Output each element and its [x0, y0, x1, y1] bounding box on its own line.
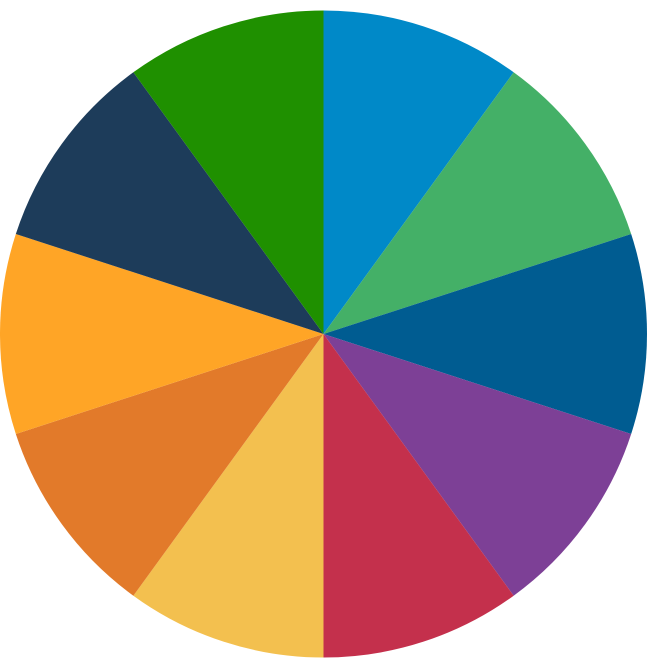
slice: orange: [16, 334, 324, 596]
slice: amber: [0, 234, 324, 434]
slice: crimson: [324, 334, 514, 658]
slice: purple: [324, 334, 631, 596]
slice: navy: [16, 72, 324, 334]
slice: dark green: [133, 10, 324, 334]
slice: dark blue: [324, 234, 647, 434]
slice: green: [324, 72, 631, 334]
slice: blue: [324, 10, 514, 334]
slice: yellow: [133, 334, 324, 658]
